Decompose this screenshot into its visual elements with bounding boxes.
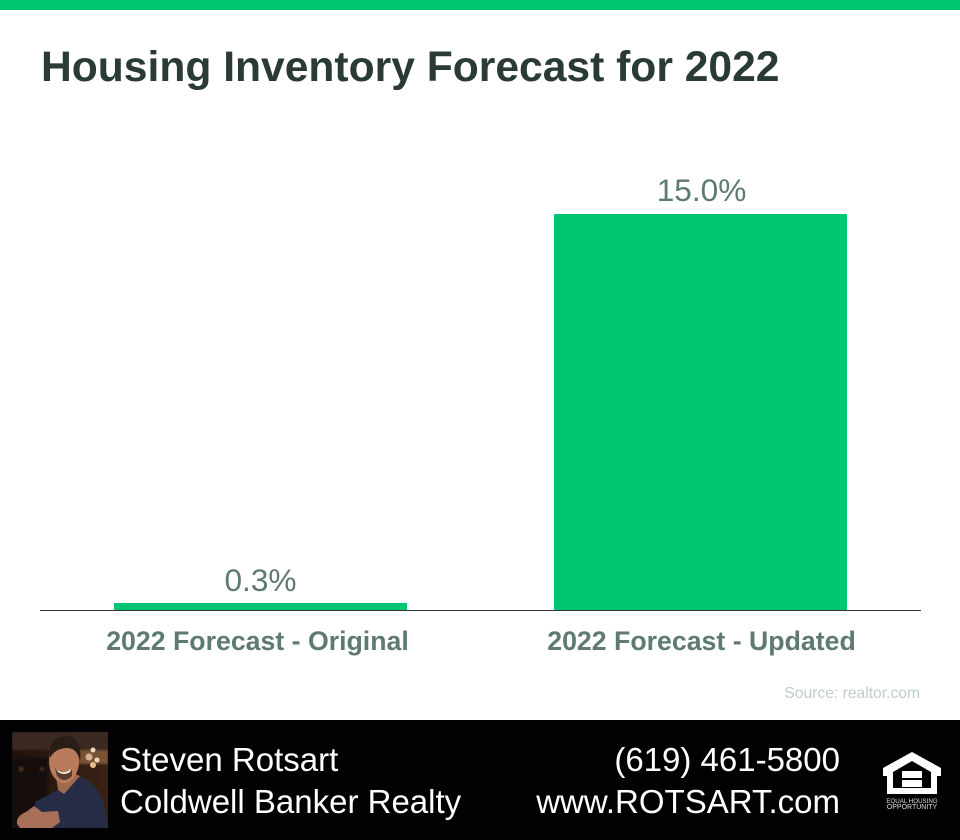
value label: updated: 15.0% xyxy=(657,172,746,208)
bar: updated xyxy=(554,214,847,610)
bar: original xyxy=(114,603,407,610)
source note: Source: realtor.com xyxy=(784,685,920,702)
phone: (619) 461-5800 xyxy=(614,741,840,778)
top accent bar xyxy=(0,0,960,10)
value label: original: 0.3% xyxy=(224,562,296,598)
icon: equal housing opportunity: EQUAL HOUSING xyxy=(886,798,938,805)
category label: updated: 2022 Forecast - Updated xyxy=(547,626,856,656)
axis line xyxy=(40,610,921,611)
icon: equal housing opportunity: OPPORTUNITY xyxy=(887,804,938,811)
company: Coldwell Banker Realty xyxy=(120,783,461,820)
bar chart xyxy=(40,172,921,656)
category label: original: 2022 Forecast - Original xyxy=(106,626,409,656)
footer band xyxy=(0,720,960,840)
agent name: Steven Rotsart xyxy=(120,741,338,778)
title: Housing Inventory Forecast for 2022 xyxy=(41,43,780,91)
agent photo xyxy=(12,732,108,828)
icon: equal housing opportunity xyxy=(883,752,941,811)
website: www.ROTSART.com xyxy=(536,783,840,820)
